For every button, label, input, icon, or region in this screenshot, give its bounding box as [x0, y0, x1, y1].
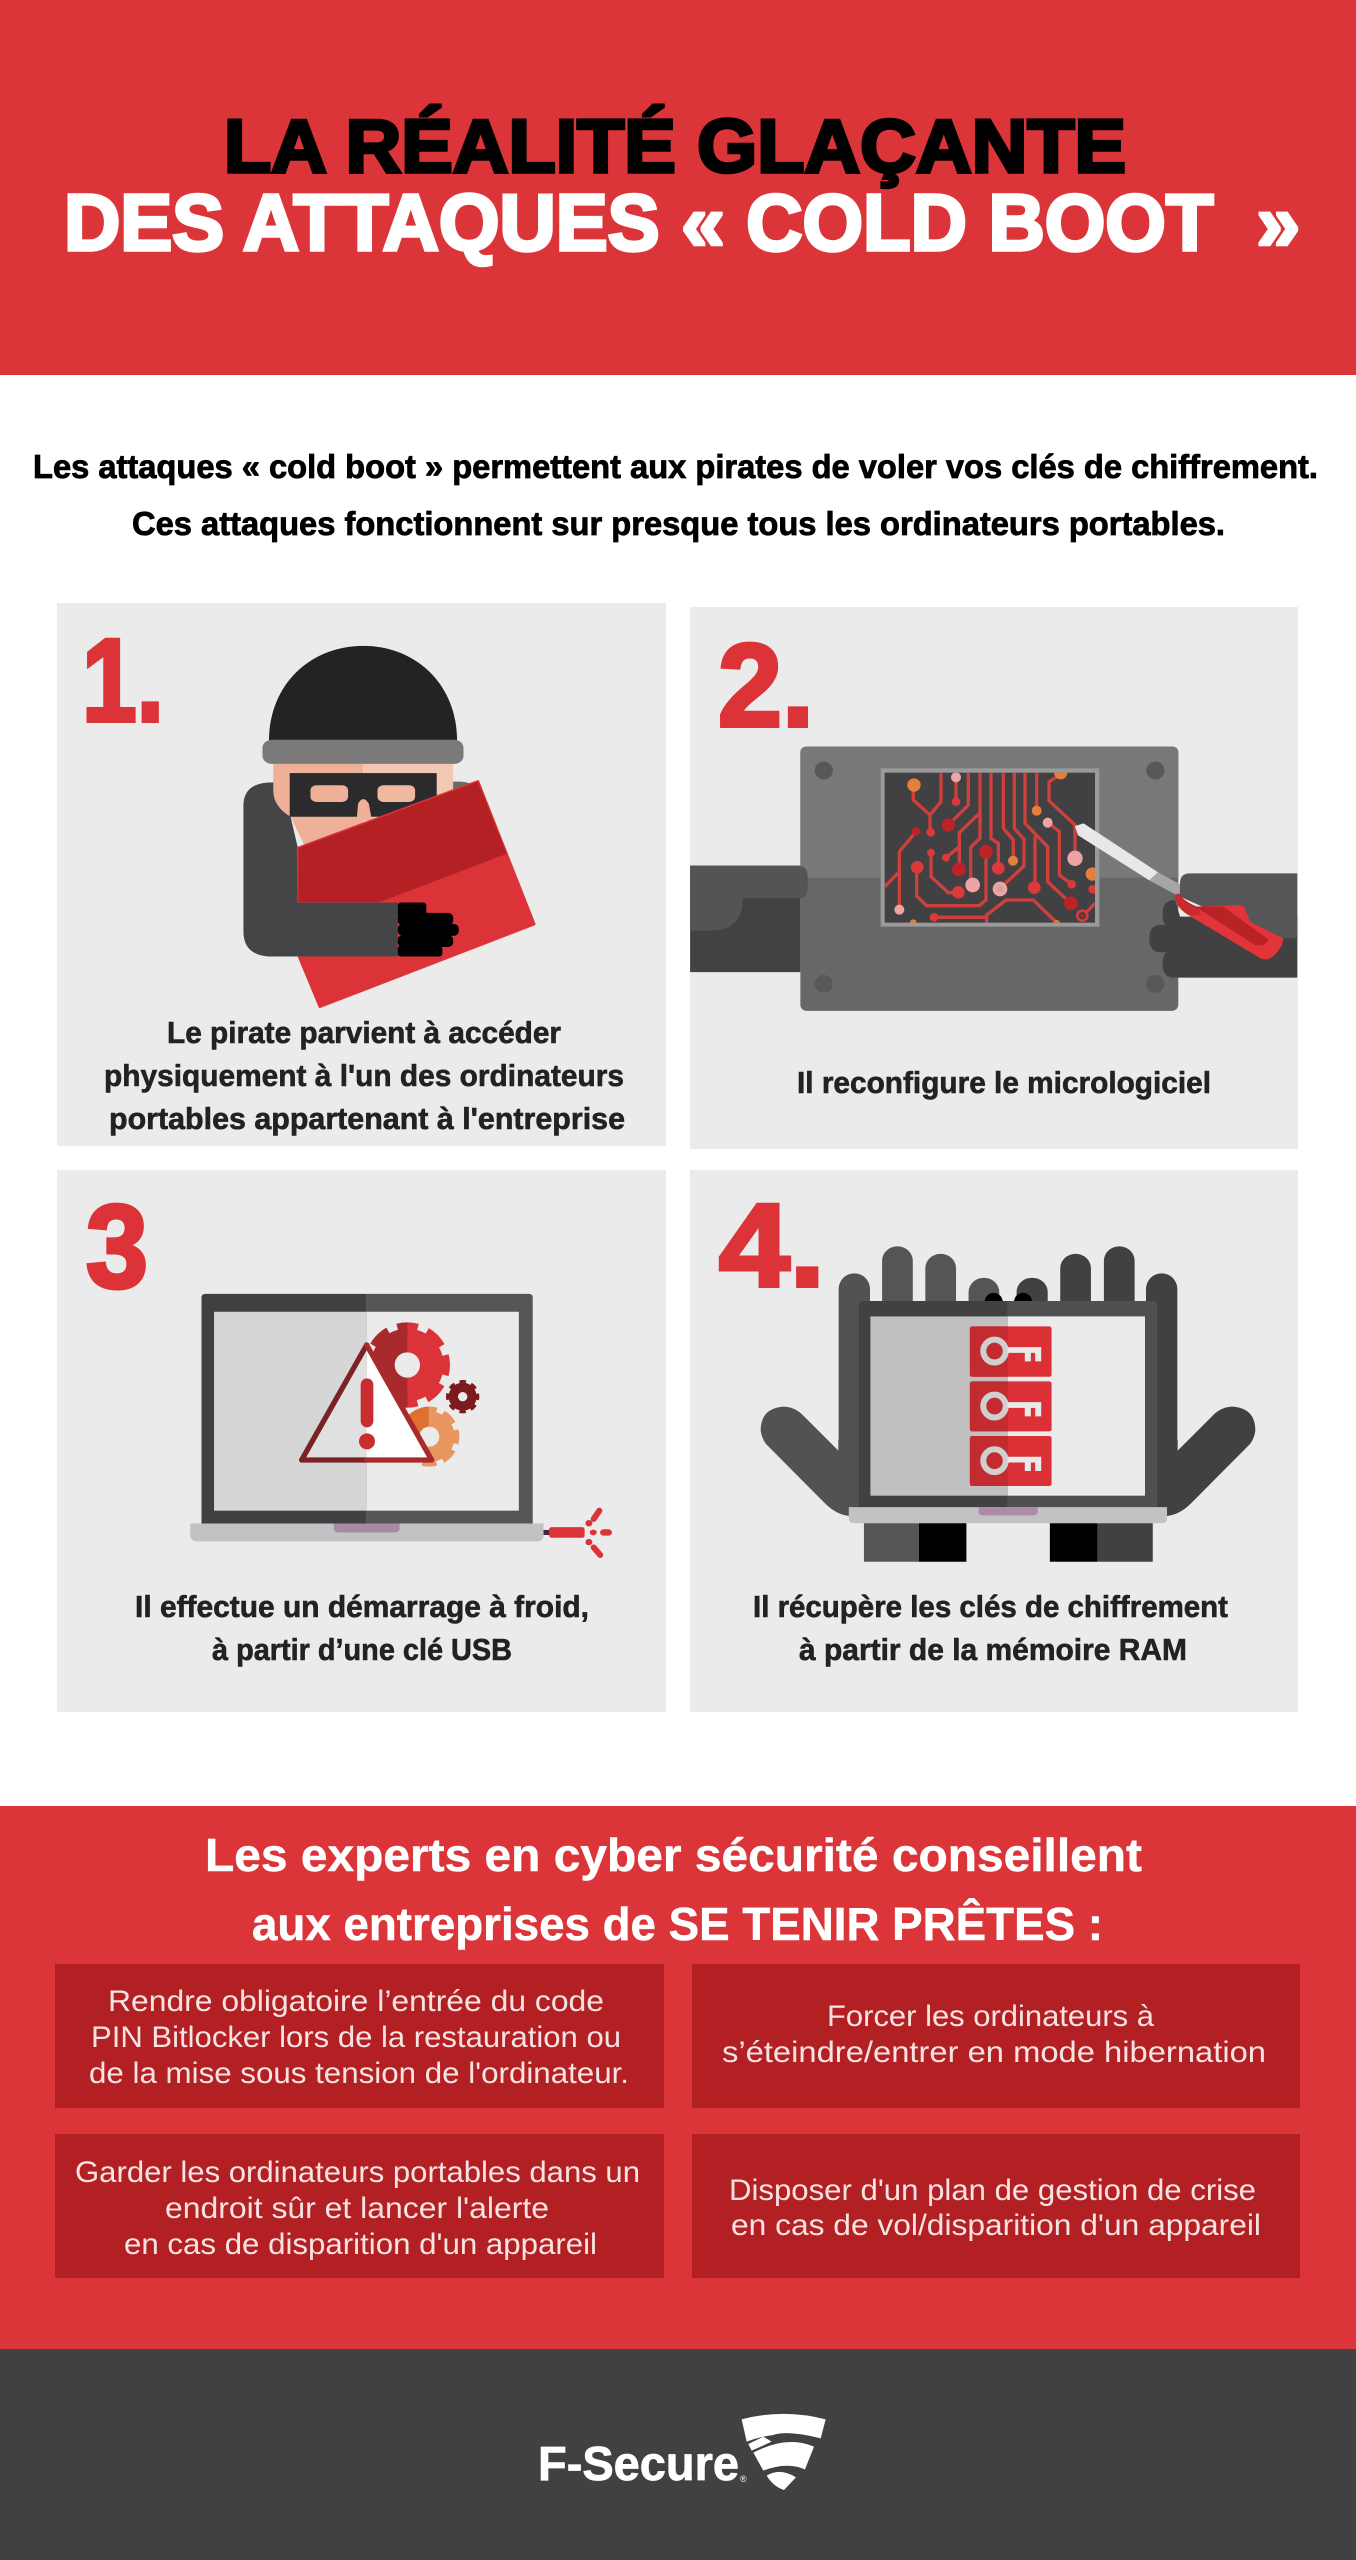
intro text — [33, 448, 1318, 542]
header banner — [0, 0, 1356, 375]
caption step 3: Il effectue un démarrage à froid, — [135, 1589, 589, 1624]
advice card 4: Disposer d'un plan de gestion de crise — [729, 2174, 1256, 2207]
caption step 4: à partir de la mémoire RAM — [799, 1632, 1187, 1667]
advice section background — [0, 1806, 1356, 2349]
gears — [371, 1329, 477, 1467]
icon: gloved hands holding laptop with keys — [761, 1246, 1255, 1562]
advice card 2: Forcer les ordinateurs à — [827, 2000, 1154, 2033]
laptop with fingers and keys — [849, 1246, 1167, 1562]
circuit screen — [881, 766, 1099, 927]
advice card 2: s’éteindre/entrer en mode hibernation — [722, 2036, 1266, 2069]
key box 2 — [970, 1381, 1052, 1431]
F-Secure logo: ® — [740, 2474, 747, 2484]
advice card 4: en cas de vol/disparition d'un appareil — [731, 2209, 1261, 2242]
footer band — [0, 2349, 1356, 2560]
icon: circuit board being reconfigured — [690, 746, 1297, 1011]
icon: laptop with warning and gears — [190, 1294, 612, 1555]
left hand outer finger and thumb — [761, 1273, 870, 1516]
title: DES ATTAQUES « COLD BOOT » — [64, 178, 1300, 267]
caption step 1: portables appartenant à l'entreprise — [109, 1101, 625, 1136]
title: LA RÉALITÉ GLAÇANTE — [224, 104, 1126, 188]
advice card 3: en cas de disparition d'un appareil — [124, 2228, 597, 2261]
icon: hacker holding a laptop — [243, 646, 534, 1006]
caption step 1: Le pirate parvient à accéder — [167, 1015, 561, 1050]
F-Secure logo: F-Secure — [538, 2438, 739, 2491]
key box 3 — [970, 1436, 1052, 1486]
intro text: Les attaques « cold boot » permettent aux pirates de voler vos clés de chiffrement. — [33, 448, 1318, 485]
title — [64, 104, 1300, 267]
icon: shield — [742, 2414, 826, 2490]
panel: step 3 — [57, 1170, 666, 1712]
advice card 1: PIN Bitlocker lors de la restauration ou — [91, 2021, 621, 2054]
caption step 3: à partir d’une clé USB — [212, 1632, 512, 1667]
advice card 1: Rendre obligatoire l’entrée du code — [108, 1985, 604, 2018]
panel: step 4 — [690, 1170, 1298, 1712]
step number 2: 2. — [718, 620, 814, 752]
advice card 3: Garder les ordinateurs portables dans un — [75, 2156, 640, 2189]
USB key with sparks — [544, 1511, 612, 1555]
panel: step 1 — [57, 603, 666, 1146]
right hand outer finger and thumb — [1146, 1273, 1255, 1516]
caption step 2: Il reconfigure le micrologiciel — [797, 1065, 1211, 1100]
caption step 1 — [104, 1015, 625, 1136]
advice card 1 — [55, 1964, 664, 2108]
warning triangle — [302, 1345, 432, 1460]
caption step 1: physiquement à l'un des ordinateurs — [104, 1058, 624, 1093]
step number 1: 1. — [82, 615, 164, 747]
advice heading — [205, 1829, 1142, 1950]
advice card 2 — [692, 1964, 1300, 2108]
F-Secure logo — [538, 2414, 826, 2491]
advice heading: Les experts en cyber sécurité conseillent — [205, 1829, 1142, 1881]
advice card 4 — [692, 2134, 1300, 2278]
advice card 1: de la mise sous tension de l'ordinateur. — [89, 2057, 629, 2090]
step number 3: 3 — [86, 1181, 148, 1313]
screwdriver blade — [1075, 823, 1182, 894]
step number 4: 4. — [719, 1180, 825, 1312]
advice card 3: endroit sûr et lancer l'alerte — [165, 2192, 549, 2225]
caption step 3 — [135, 1589, 589, 1667]
hand with screwdriver — [1149, 873, 1297, 978]
advice heading: aux entreprises de SE TENIR PRÊTES : — [252, 1898, 1103, 1950]
caption step 4 — [753, 1589, 1228, 1667]
panel: step 2 — [690, 607, 1298, 1149]
key box 1 — [970, 1326, 1052, 1377]
caption step 4: Il récupère les clés de chiffrement — [753, 1589, 1228, 1624]
intro text: Ces attaques fonctionnent sur presque tous les ordinateurs portables. — [132, 505, 1225, 542]
advice card 3 — [55, 2134, 664, 2278]
